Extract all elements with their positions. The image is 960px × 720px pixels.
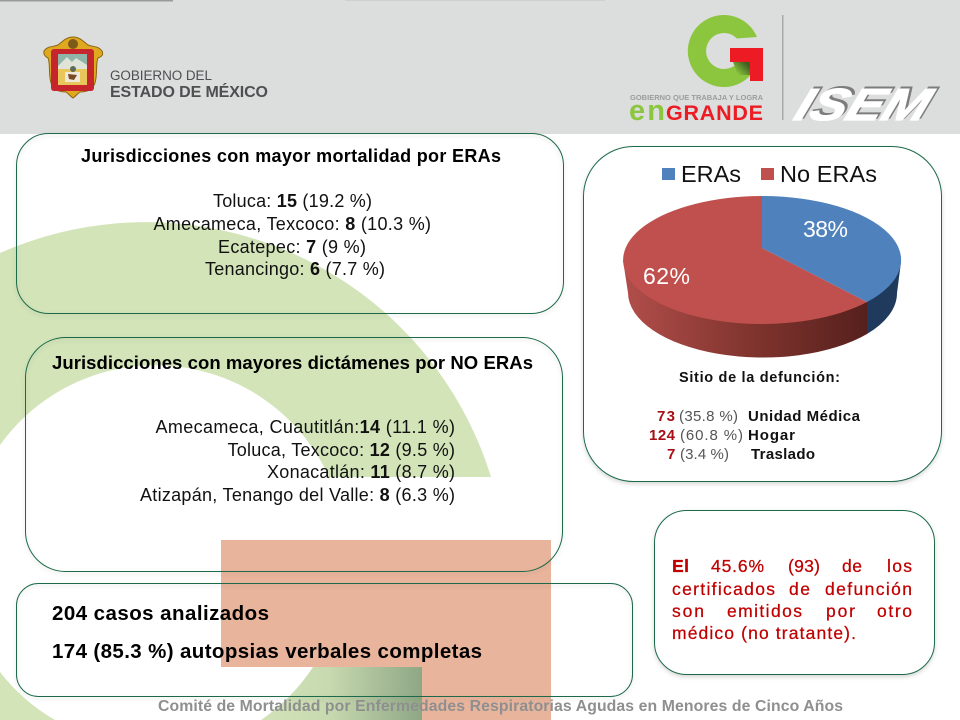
list: mortalidad por jurisdicción: Toluca: 15 (19.2 %): [213, 191, 372, 211]
logo text: Gobierno del Estado de México: [110, 68, 268, 101]
heading: mayor mortalidad: Jurisdicciones con mayor mortalidad por ERAs: [81, 146, 501, 166]
panel: callout certificados de defunción: otro: [877, 601, 912, 621]
logo text: Gobierno del Estado de México: ESTADO DE MÉXICO: [110, 82, 268, 101]
heading: mayores dictámenes: Jurisdicciones con mayores dictámenes por NO ERAs: [52, 352, 533, 373]
chart legend: [662, 161, 877, 187]
panel: callout certificados de defunción: de: [789, 579, 810, 599]
list: sitio de la defunción: 7: [667, 446, 675, 463]
list: sitio de la defunción: (60.8 %): [680, 427, 743, 444]
panel: callout certificados de defunción: certificados: [672, 579, 775, 599]
panel: jurisdicciones con mayores dictámenes por NO ERAs: [26, 338, 562, 572]
list: dictámenes por jurisdicción: Xonacatlán: 11 (8.7 %): [267, 462, 455, 482]
chart legend: No ERAs: [780, 161, 877, 187]
list: mortalidad por jurisdicción: [154, 191, 431, 279]
list: sitio de la defunción: Hogar: [748, 427, 795, 444]
list: sitio de la defunción: [649, 408, 861, 463]
list: sitio de la defunción: (35.8 %): [679, 408, 738, 425]
logo: G en grande: GOBIERNO QUE TRABAJA Y LOGRA: [630, 93, 764, 102]
panel: callout certificados de defunción: son: [672, 601, 704, 621]
panel: callout certificados de defunción: El: [672, 556, 689, 576]
panel: casos analizados: 174 (85.3 %) autopsias verbales completas: [52, 640, 482, 663]
logo: G en grande: GRANDE: [666, 101, 763, 125]
list: mortalidad por jurisdicción: Tenancingo: 6 (7.7 %): [205, 259, 385, 279]
panel: callout certificados de defunción: 45.6%: [711, 556, 764, 576]
list: dictámenes por jurisdicción: Amecameca, Cuautitlán:14 (11.1 %): [156, 417, 455, 437]
icon: Estado de México coat of arms: [44, 37, 103, 98]
panel: casos analizados: [16, 584, 632, 696]
panel: callout certificados de defunción: [654, 510, 934, 674]
panel: callout certificados de defunción: defunción: [825, 579, 912, 599]
panel: callout certificados de defunción: por: [826, 601, 855, 621]
pie chart: ERAs 38%, No ERAs 62%: [623, 196, 901, 358]
list: sitio de la defunción: (3.4 %): [680, 446, 729, 463]
panel: callout certificados de defunción: (93): [788, 556, 820, 576]
panel: pie chart and sitio de la defunción: [584, 146, 942, 482]
list: sitio de la defunción: 73: [657, 408, 675, 425]
pie chart: ERAs 38%, No ERAs 62%: 62%: [643, 263, 690, 289]
list: sitio de la defunción: Unidad Médica: [748, 408, 861, 425]
list: dictámenes por jurisdicción: Toluca, Texcoco: 12 (9.5 %): [228, 440, 455, 460]
header band: [0, 0, 960, 134]
heading: sitio de la defunción: Sitio de la defunción:: [679, 370, 840, 386]
list: dictámenes por jurisdicción: [140, 417, 455, 505]
background: large green G arc: [0, 222, 491, 720]
list: dictámenes por jurisdicción: Atizapán, Tenango del Valle: 8 (6.3 %): [140, 485, 455, 505]
logo: ISEM: ISEM: [788, 79, 940, 130]
pie chart: ERAs 38%, No ERAs 62%: 38%: [803, 216, 848, 242]
panel: jurisdicciones con mayor mortalidad por ERAs: [16, 134, 564, 314]
logo: G en grande: [629, 15, 764, 127]
chart legend: ERAs: [681, 161, 741, 187]
panel: callout certificados de defunción: emitidos: [727, 601, 802, 621]
panel: casos analizados: 204 casos analizados: [52, 602, 269, 625]
divider line between logos: [782, 15, 784, 120]
panel: callout certificados de defunción: médico (no tratante).: [672, 623, 856, 643]
footer: Comité de Mortalidad por Enfermedades Respiratorias Agudas en Menores de Cinco Años: [158, 698, 843, 715]
list: sitio de la defunción: 124: [649, 427, 676, 444]
list: mortalidad por jurisdicción: Ecatepec: 7 (9 %): [218, 237, 366, 257]
background: orange square: [221, 540, 551, 720]
panel: callout certificados de defunción: de: [842, 556, 862, 576]
panel: callout certificados de defunción: los: [887, 556, 912, 576]
list: mortalidad por jurisdicción: Amecameca, Texcoco: 8 (10.3 %): [154, 214, 431, 234]
list: sitio de la defunción: Traslado: [751, 446, 815, 463]
logo text: Gobierno del Estado de México: GOBIERNO DEL: [110, 68, 212, 83]
logo: ISEM: ISEM: [791, 77, 943, 128]
logo: G en grande: en: [629, 95, 665, 127]
